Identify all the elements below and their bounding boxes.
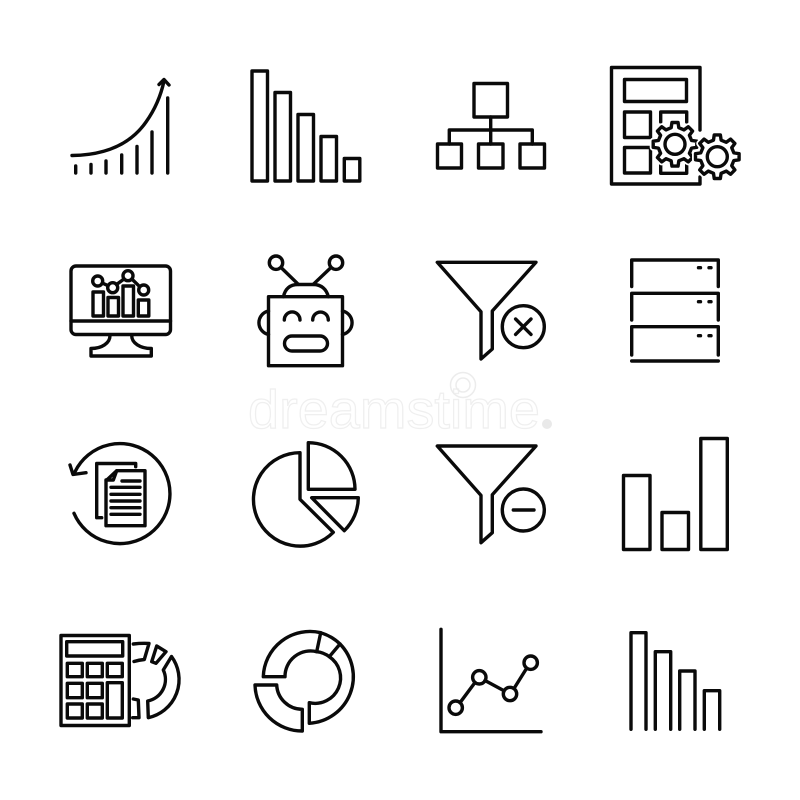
icon: open descending bars <box>631 633 720 729</box>
icon: robot head <box>259 256 352 366</box>
icon: monitor with chart <box>71 266 170 356</box>
icon: funnel with cross <box>437 262 544 359</box>
icon: calculator sheet with gears <box>612 68 739 184</box>
icon: calculator with ring chart <box>61 636 179 726</box>
icon: descending bar chart <box>252 71 360 181</box>
icon: documents in circular arrow <box>70 444 170 544</box>
icon: line chart <box>441 629 541 732</box>
icon: pie chart <box>253 443 358 546</box>
gear: small <box>696 135 739 178</box>
icon: funnel with minus <box>437 446 544 543</box>
icon: three bar chart <box>624 438 727 550</box>
icon: growth curve with arrow <box>72 80 169 173</box>
gear: large <box>653 123 697 166</box>
icon: donut chart <box>255 631 353 731</box>
icon: server stack <box>632 260 718 361</box>
watermark: dreamstime <box>248 380 540 440</box>
icon: hierarchy diagram <box>438 84 544 168</box>
